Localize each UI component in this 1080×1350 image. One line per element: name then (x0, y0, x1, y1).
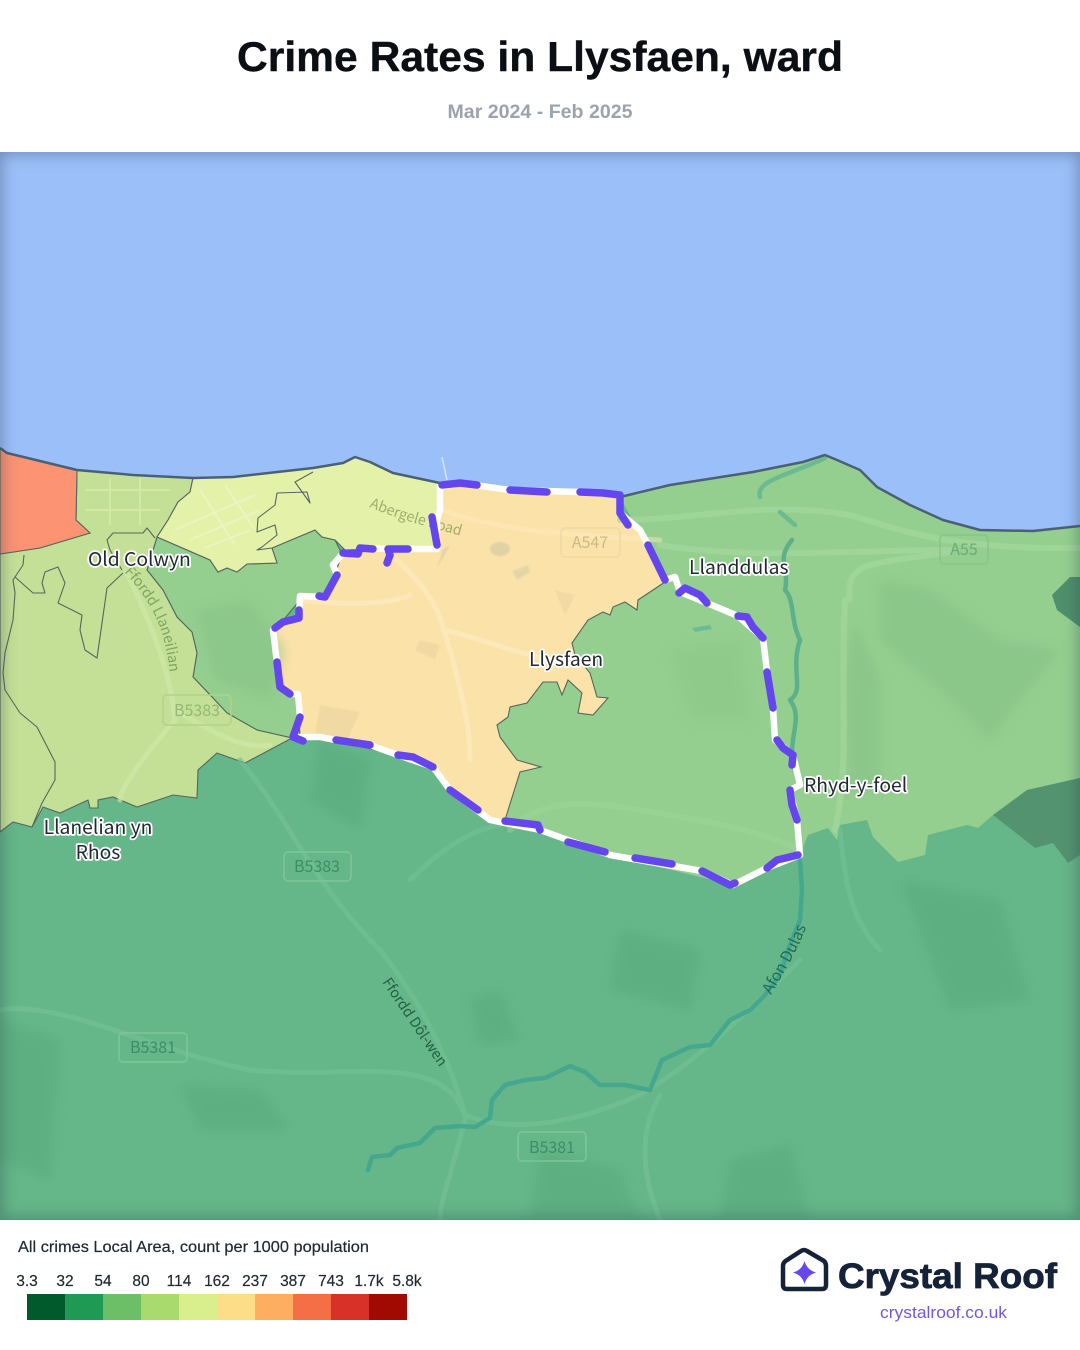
area: lime (157, 457, 440, 572)
shield: A55 (940, 535, 988, 564)
shield: B5383 south (284, 852, 351, 881)
streets in Old Colwyn (85, 478, 260, 548)
title: Crime Rates in Llysfaen, ward (237, 33, 843, 80)
shield: A547 (561, 528, 620, 557)
road name: Abergele Road: Abergele Road (369, 498, 462, 536)
area: west mid green (147, 530, 345, 740)
sea (0, 152, 1080, 1220)
road name: Ffordd Llaneilian: Ffordd Llaneilian (125, 567, 178, 671)
place labels (44, 544, 907, 865)
shield: B5383 west (163, 695, 231, 725)
shield: B5383 south: B5383 (294, 853, 340, 877)
roads (0, 509, 1080, 1220)
area: east mid green (480, 455, 1080, 885)
thin boundary lines west (3, 472, 313, 827)
label: Llanelian yn: Llanelian yn (44, 812, 152, 840)
legend values: 743 (318, 1273, 344, 1290)
legend values: 3.3 (16, 1273, 38, 1290)
legend values: 162 (204, 1273, 230, 1290)
area: dark patches in the south (0, 740, 1030, 1220)
terrain shading east (195, 580, 1060, 790)
legend values: 387 (280, 1273, 306, 1290)
shield: B5381 east (518, 1132, 586, 1161)
shield: A547: A547 (572, 529, 608, 553)
label: Llanddulas: Llanddulas (689, 552, 789, 580)
footer background (0, 1220, 1080, 1350)
water patch (692, 625, 712, 632)
legend values: 80 (132, 1273, 150, 1290)
legend values (16, 1273, 422, 1290)
website: crystalroof.co.uk (880, 1304, 1008, 1322)
label: Llysfaen: Llysfaen (529, 644, 603, 672)
boundary white line (273, 483, 800, 885)
subtitle: Mar 2024 - Feb 2025 (448, 102, 633, 123)
coastline (0, 448, 1080, 531)
legend values: 32 (56, 1273, 74, 1290)
area: dark green patch east (1052, 577, 1080, 627)
road shields (119, 528, 988, 1161)
legend values: 5.8k (392, 1273, 422, 1290)
label: Old Colwyn: Old Colwyn (88, 544, 191, 572)
logo (783, 1250, 1057, 1322)
map (0, 152, 1080, 1220)
legend swatches (27, 1294, 407, 1320)
boundary purple dashes (275, 483, 798, 885)
shield: B5383 west: B5383 (174, 697, 220, 721)
pier line (442, 457, 447, 480)
area: red high crime (0, 448, 90, 554)
area: west light green (0, 470, 292, 832)
legend values: 1.7k (354, 1273, 384, 1290)
land: low crime area (dark green) (0, 448, 1080, 1220)
legend title: All crimes Local Area, count per 1000 population (18, 1239, 369, 1256)
shield: B5381 east: B5381 (529, 1134, 575, 1158)
label: Rhos: Rhos (76, 837, 120, 865)
area: dark green patch south-east (993, 778, 1080, 863)
shield: B5381 west (119, 1033, 187, 1062)
legend (16, 1239, 422, 1320)
area: ward orange (273, 483, 665, 820)
road name: Ffordd Dol-wen: Ffordd Dôl-wen (382, 978, 445, 1066)
legend values: 237 (242, 1273, 268, 1290)
shield: A55: A55 (950, 536, 978, 560)
ward terrain (315, 542, 575, 745)
ward boundary (273, 483, 800, 885)
label: Rhyd-y-foel: Rhyd-y-foel (804, 770, 907, 798)
wordmark: Crystal Roof (838, 1257, 1057, 1296)
river: Afon Dulas (368, 458, 825, 1170)
legend values: 54 (94, 1273, 112, 1290)
shield: B5381 west: B5381 (130, 1034, 176, 1058)
icon: house with star (783, 1250, 826, 1289)
legend values: 114 (167, 1273, 192, 1290)
road name: Afon Dulas: Afon Dulas (763, 925, 806, 995)
